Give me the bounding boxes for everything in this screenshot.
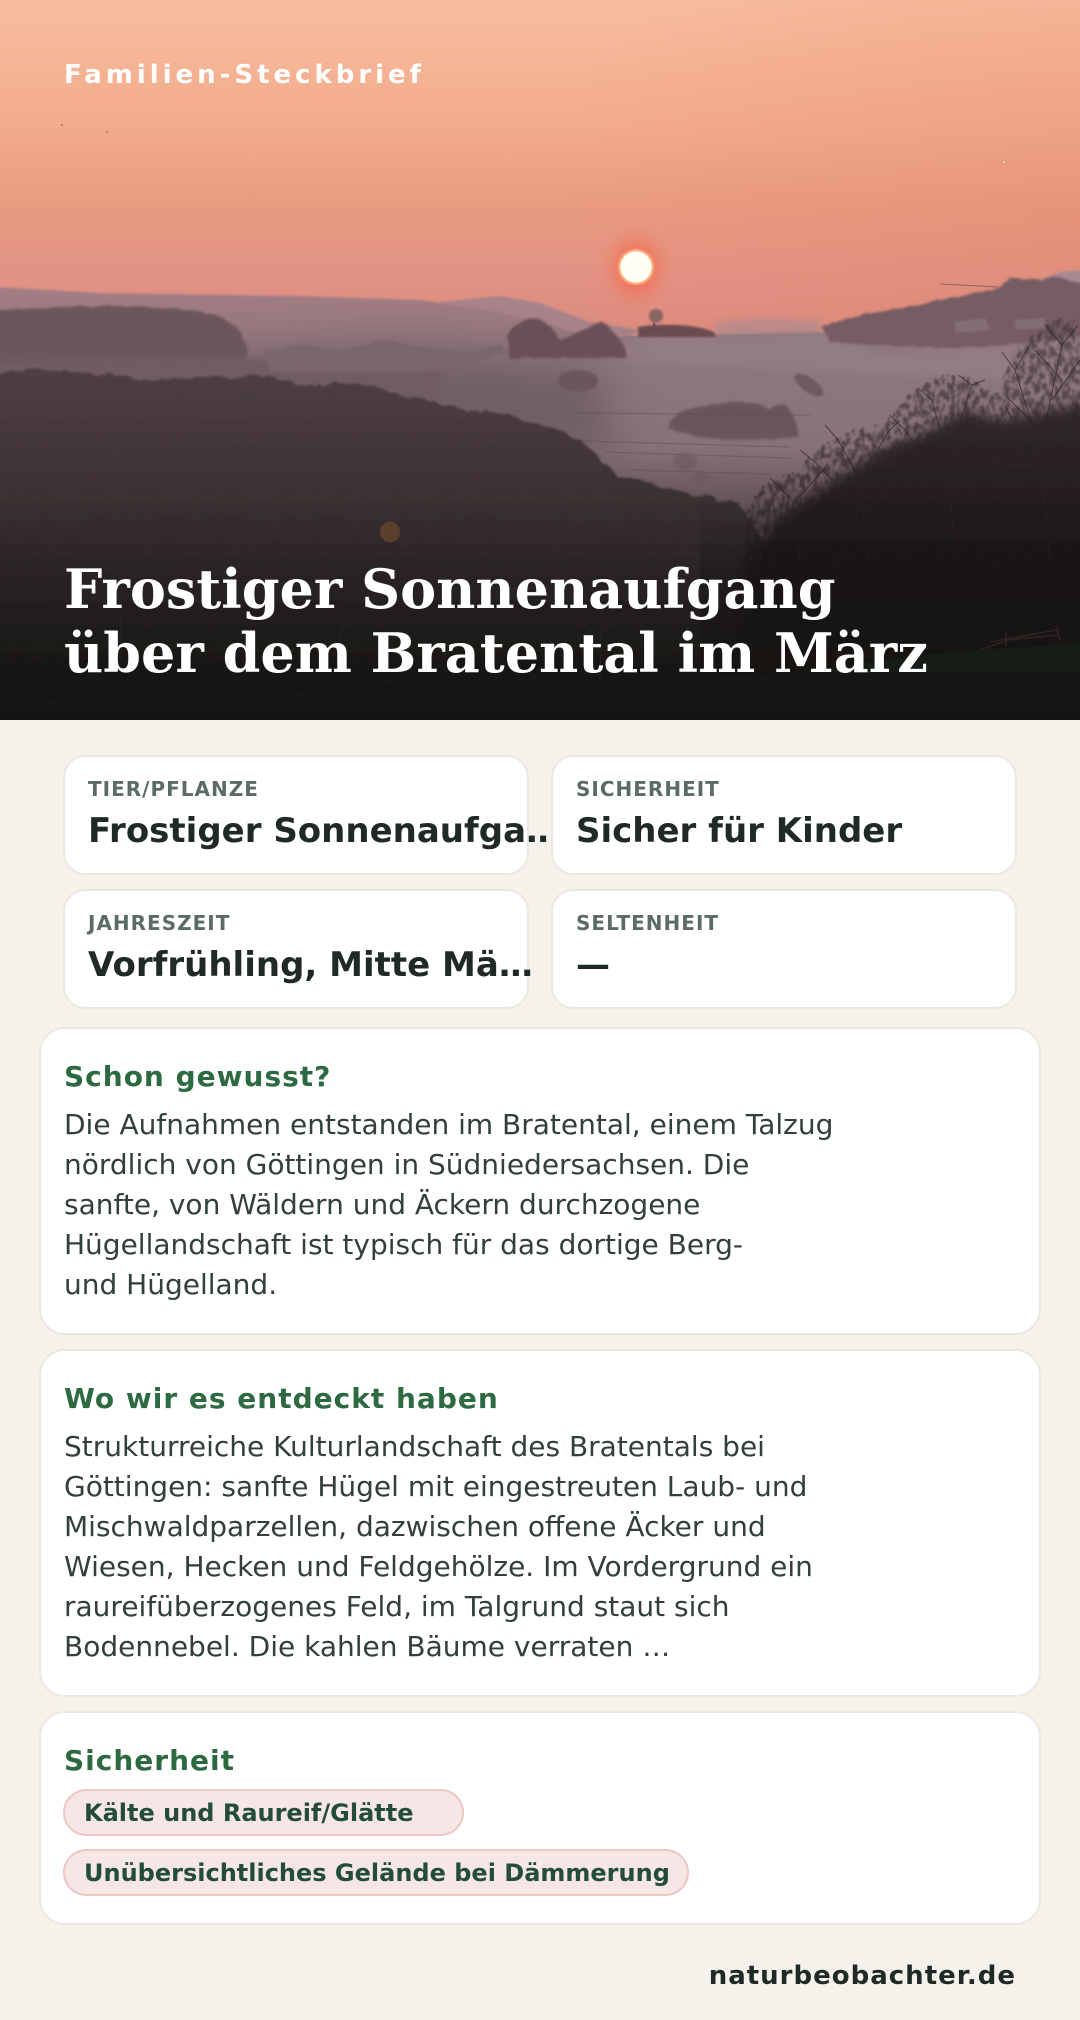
card: Sicherheit: Sicher für Kinder xyxy=(576,811,902,851)
card: Sicherheit: SICHERHEIT xyxy=(576,777,720,801)
pill: Kälte xyxy=(63,1789,464,1836)
card: Tier/Pflanze xyxy=(63,755,529,875)
frost lines in the field xyxy=(578,413,810,474)
panel: Schon gewusst: nördlich von Göttingen in Südniedersachsen. Die xyxy=(64,1148,749,1181)
card: Seltenheit xyxy=(551,889,1017,1009)
faint trees behind title xyxy=(85,550,640,680)
card: Tier/Pflanze: Frostiger Sonnenaufga… xyxy=(88,811,560,851)
hills and fields xyxy=(0,268,1080,740)
title: Frostiger Sonnenaufgang xyxy=(64,557,835,621)
panel: Wo wir es entdeckt haben: Mischwaldparzellen, dazwischen offene Äcker und xyxy=(64,1510,766,1543)
bare trees right xyxy=(745,318,1080,740)
lens flare xyxy=(380,522,400,542)
panel: Wo wir es entdeckt haben xyxy=(39,1349,1041,1697)
card: Jahreszeit: Vorfrühling, Mitte Mä… xyxy=(88,945,533,985)
card: Seltenheit: SELTENHEIT xyxy=(576,911,719,935)
panel: Wo wir es entdeckt haben: Wiesen, Hecken und Feldgehölze. Im Vordergrund ein xyxy=(64,1550,813,1583)
pill: Gelände: Unübersichtliches Gelände bei Dämmerung xyxy=(84,1859,670,1887)
eyebrow label: Familien-Steckbrief xyxy=(64,60,425,90)
panel: Schon gewusst: Die Aufnahmen entstanden im Bratental, einem Talzug xyxy=(64,1108,833,1141)
crane xyxy=(940,284,998,287)
card: Seltenheit: — xyxy=(576,945,610,985)
panel: Schon gewusst xyxy=(39,1027,1041,1335)
panel: Schon gewusst: Schon gewusst? xyxy=(64,1060,331,1093)
pill: Kälte: Kälte und Raureif/Glätte xyxy=(84,1799,413,1827)
title xyxy=(64,557,928,685)
panel: Wo wir es entdeckt haben: Strukturreiche Kulturlandschaft des Bratentals bei xyxy=(64,1430,765,1463)
tree clusters and hedges xyxy=(262,309,827,440)
card: Jahreszeit: JAHRESZEIT xyxy=(88,911,230,935)
title: über dem Bratental im März xyxy=(64,621,928,685)
footer source: naturbeobachter.de xyxy=(709,1961,1016,1991)
panel: Wo wir es entdeckt haben: Wo wir es entdeckt haben xyxy=(64,1382,499,1415)
panel: Sicherheit: Sicherheit xyxy=(64,1744,235,1777)
sun xyxy=(596,222,676,314)
card: Jahreszeit xyxy=(63,889,529,1009)
panel: Schon gewusst: Hügellandschaft ist typisch für das dortige Berg- xyxy=(64,1228,743,1261)
panel: Schon gewusst: und Hügelland. xyxy=(64,1268,277,1301)
right hillside xyxy=(1040,268,1080,295)
panel: Schon gewusst: sanfte, von Wäldern und Äckern durchzogene xyxy=(64,1188,700,1221)
pill: Gelände xyxy=(63,1849,689,1896)
hero photo: frosty sunrise over the valley xyxy=(0,0,1080,720)
panel: Wo wir es entdeckt haben: raureifüberzogenes Feld, im Talgrund staut sich xyxy=(64,1590,730,1623)
meadow xyxy=(0,642,1080,730)
panel: Wo wir es entdeckt haben: Göttingen: sanfte Hügel mit eingestreuten Laub- und xyxy=(64,1470,807,1503)
foreground forest xyxy=(0,368,790,740)
panel: Wo wir es entdeckt haben: Bodennebel. Die kahlen Bäume verraten … xyxy=(64,1630,670,1663)
sky xyxy=(0,0,1080,345)
card: Sicherheit xyxy=(551,755,1017,875)
card: Tier/Pflanze: TIER/PFLANZE xyxy=(88,777,259,801)
left dark ridge xyxy=(0,306,248,376)
panel: Sicherheit xyxy=(39,1711,1041,1925)
fence xyxy=(980,626,1060,650)
